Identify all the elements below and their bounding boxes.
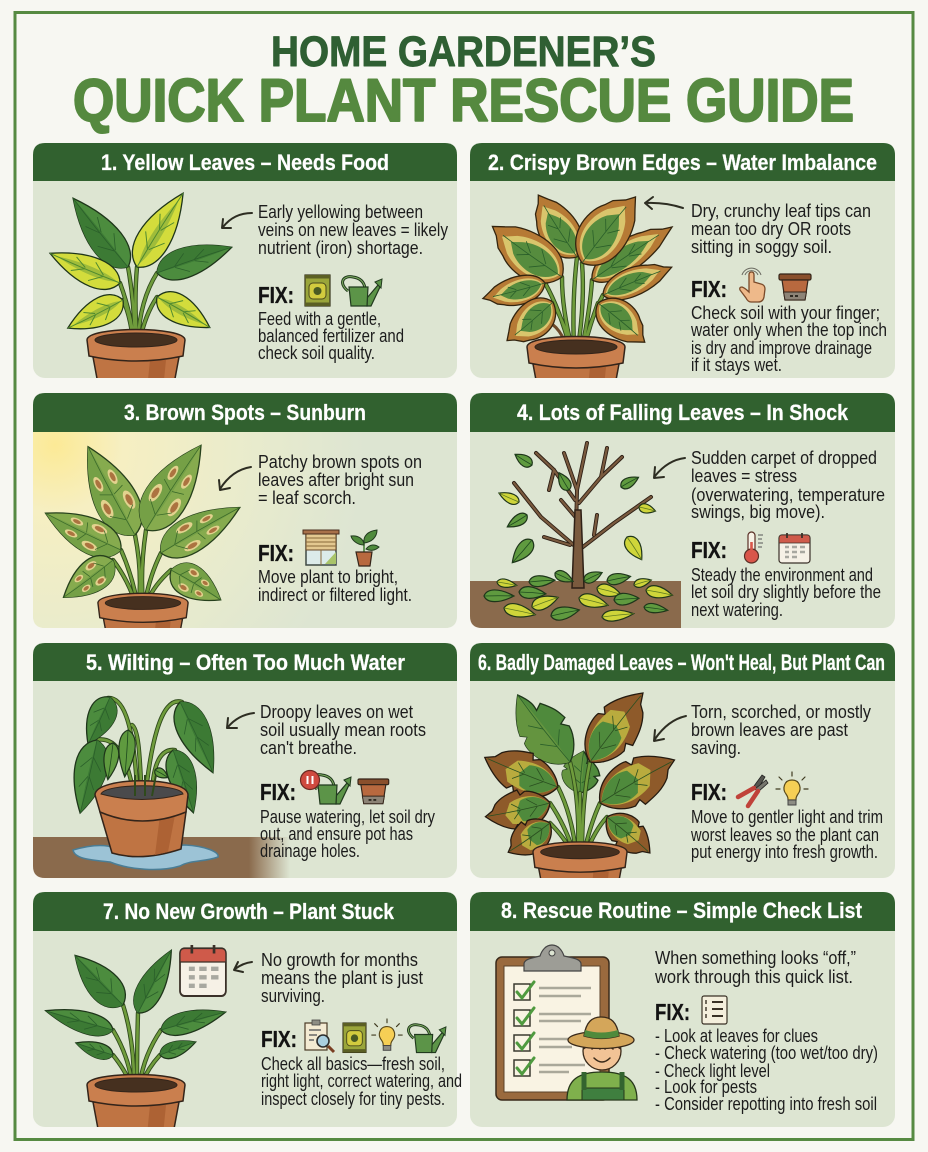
icon: numbered list — [702, 996, 727, 1024]
fix text: next watering. — [691, 600, 783, 620]
checklist text — [655, 1026, 878, 1114]
panel 2: crispy brown edges — [470, 143, 895, 378]
symptom text — [691, 702, 871, 758]
sun glow — [33, 432, 457, 628]
icon: small potted plant — [351, 530, 379, 566]
symptom text: saving. — [691, 738, 741, 758]
symptom text: (overwatering, temperature — [691, 485, 885, 505]
header bar — [470, 143, 895, 181]
arrow — [222, 213, 252, 228]
symptom text: Patchy brown spots on — [258, 452, 422, 472]
fix text: is dry and improve drainage — [691, 338, 872, 358]
fix text: let soil dry slightly before the — [691, 582, 881, 602]
icon: checklist with magnifier — [305, 1020, 334, 1052]
symptom text — [654, 948, 856, 987]
icon: watering can with pause sign — [300, 770, 351, 804]
checklist text: - Look at leaves for clues — [655, 1026, 818, 1046]
fix text — [690, 807, 883, 862]
header bar — [33, 892, 457, 931]
illustration: plant with scorched spots — [44, 444, 241, 628]
heading: 1. Yellow Leaves – Needs Food — [101, 150, 389, 175]
icon: thermometer — [744, 532, 763, 563]
panel background — [33, 892, 457, 1127]
icon: watering can — [343, 277, 382, 306]
header bar — [470, 643, 895, 681]
panel 8: rescue routine — [470, 892, 895, 1127]
heading: 3. Brown Spots – Sunburn — [124, 400, 366, 425]
table surface — [33, 837, 290, 878]
symptom text — [258, 452, 422, 508]
fix text: Pause watering, let soil dry — [260, 807, 435, 827]
puddle — [73, 845, 218, 869]
icon: calendar — [779, 533, 810, 563]
symptom text: Sudden carpet of dropped — [691, 448, 877, 468]
fix text: right light, correct watering, and — [261, 1071, 462, 1091]
header bar — [470, 892, 895, 931]
icon: calendar — [180, 945, 226, 996]
icon: light bulb — [372, 1019, 402, 1050]
symptom text: = leaf scorch. — [258, 488, 356, 508]
fix text: balanced fertilizer and — [258, 326, 404, 346]
symptom text: Torn, scorched, or mostly — [691, 702, 871, 722]
fix label: FIX: — [655, 999, 690, 1025]
illustration: plant with crispy leaves — [482, 194, 674, 378]
symptom text: can't breathe. — [260, 738, 357, 758]
fix text: Move to gentler light and trim — [691, 807, 883, 827]
checklist text: - Look for pests — [655, 1077, 757, 1097]
fix label: FIX: — [261, 1026, 297, 1052]
symptom text: leaves = stress — [691, 466, 797, 486]
fix label: FIX: — [258, 540, 294, 566]
fix text: check soil quality. — [258, 343, 375, 363]
fix text: Feed with a gentle, — [258, 309, 381, 329]
fix text — [260, 807, 435, 861]
fix text — [690, 303, 887, 375]
icon: fertilizer bag — [305, 275, 330, 306]
heading: 7. No New Growth – Plant Stuck — [103, 899, 394, 924]
icon: light bulb — [776, 772, 808, 805]
ground — [470, 581, 681, 628]
panel background — [470, 892, 895, 1127]
heading: 2. Crispy Brown Edges – Water Imbalance — [488, 150, 877, 175]
fix text: if it stays wet. — [691, 355, 782, 375]
arrow — [645, 197, 683, 209]
illustration: bare tree and dropped leaves — [484, 443, 674, 622]
symptom text: No growth for months — [261, 950, 418, 970]
fix label: FIX: — [691, 779, 727, 805]
panel 6: badly damaged leaves — [470, 643, 895, 878]
panel 7: no new growth — [33, 892, 462, 1145]
illustration: clipboard checklist — [496, 945, 609, 1100]
symptom text: means the plant is just — [261, 968, 423, 988]
fix label: FIX: — [258, 282, 294, 308]
title line 1: HOME GARDENER’S — [271, 28, 656, 76]
fix text: put energy into fresh growth. — [691, 842, 878, 862]
symptom text: nutrient (iron) shortage. — [258, 238, 423, 258]
icon: window with blinds — [303, 530, 339, 565]
icon: finger pressing soil — [740, 268, 765, 302]
panel background — [33, 643, 457, 878]
arrow — [227, 713, 254, 728]
panel background — [470, 143, 895, 378]
symptom text — [258, 202, 448, 258]
panel background — [470, 643, 895, 878]
fix text — [261, 1054, 462, 1109]
header bar — [33, 393, 457, 432]
arrow — [234, 962, 252, 972]
title — [73, 28, 854, 134]
checklist text: - Consider repotting into fresh soil — [655, 1094, 877, 1114]
fix text: drainage holes. — [260, 841, 360, 861]
panel 1: yellow leaves — [33, 143, 457, 400]
header bar — [470, 393, 895, 432]
panel background — [33, 393, 457, 628]
symptom text — [260, 702, 426, 758]
fix text: Check all basics—fresh soil, — [261, 1054, 445, 1074]
symptom text: soil usually mean roots — [260, 720, 426, 740]
fix text: Steady the environment and — [691, 565, 873, 585]
header bar — [33, 143, 457, 181]
panel background — [33, 143, 457, 378]
symptom text: Dry, crunchy leaf tips can — [691, 201, 871, 221]
fix text — [258, 309, 404, 363]
fix text: inspect closely for tiny pests. — [261, 1089, 445, 1109]
symptom text — [261, 950, 423, 1006]
checklist text: - Check watering (too wet/too dry) — [655, 1043, 878, 1063]
symptom text: surviving. — [261, 986, 325, 1006]
symptom text: Early yellowing between — [258, 202, 423, 222]
fix text: Check soil with your finger; — [691, 303, 880, 323]
symptom text: work through this quick list. — [654, 967, 853, 987]
heading: 8. Rescue Routine – Simple Check List — [501, 898, 862, 923]
arrow — [654, 458, 685, 478]
checklist text: - Check light level — [655, 1061, 770, 1081]
panel 4: falling leaves — [470, 393, 895, 628]
arrow — [219, 467, 251, 490]
fix text: worst leaves so the plant can — [690, 825, 879, 845]
symptom text: mean too dry OR roots — [691, 219, 851, 239]
arrow — [654, 716, 686, 741]
symptom text: swings, big move). — [691, 502, 825, 522]
panel 3: brown spots — [33, 393, 457, 628]
symptom text: When something looks “off,” — [655, 948, 856, 968]
fix text — [258, 567, 412, 605]
fix text: indirect or filtered light. — [258, 585, 412, 605]
fix label: FIX: — [260, 779, 296, 805]
illustration: plant with yellowing leaves — [48, 192, 233, 378]
symptom text: brown leaves are past — [691, 720, 848, 740]
fix label: FIX: — [691, 537, 727, 563]
heading: 5. Wilting – Often Too Much Water — [86, 650, 405, 675]
icon: watering can — [408, 1025, 446, 1053]
illustration: wilted plant in wet pot — [65, 691, 228, 869]
fix text: out, and ensure pot has — [260, 824, 413, 844]
symptom text: Droopy leaves on wet — [260, 702, 413, 722]
illustration: smiling gardener — [567, 1017, 637, 1100]
illustration: healthy but stalled plant — [44, 949, 227, 1127]
symptom text — [691, 448, 885, 522]
icon: pruning shears — [738, 775, 768, 806]
icon: pot with drainage holes — [358, 779, 389, 804]
header bar — [33, 643, 457, 681]
symptom text: sitting in soggy soil. — [691, 237, 832, 257]
symptom text — [691, 201, 871, 257]
fix text: water only when the top inch — [690, 320, 887, 340]
fix text: Move plant to bright, — [258, 567, 398, 587]
illustration: plant with damaged leaves — [484, 692, 676, 878]
heading: 4. Lots of Falling Leaves – In Shock — [517, 400, 848, 425]
fix label: FIX: — [691, 276, 727, 302]
icon: fertilizer bag — [343, 1023, 366, 1052]
panel background — [470, 393, 895, 628]
icon: pot — [779, 274, 811, 300]
symptom text: veins on new leaves = likely — [258, 220, 448, 240]
panel 5: wilting — [33, 643, 457, 878]
fix text — [691, 565, 881, 620]
symptom text: leaves after bright sun — [258, 470, 414, 490]
